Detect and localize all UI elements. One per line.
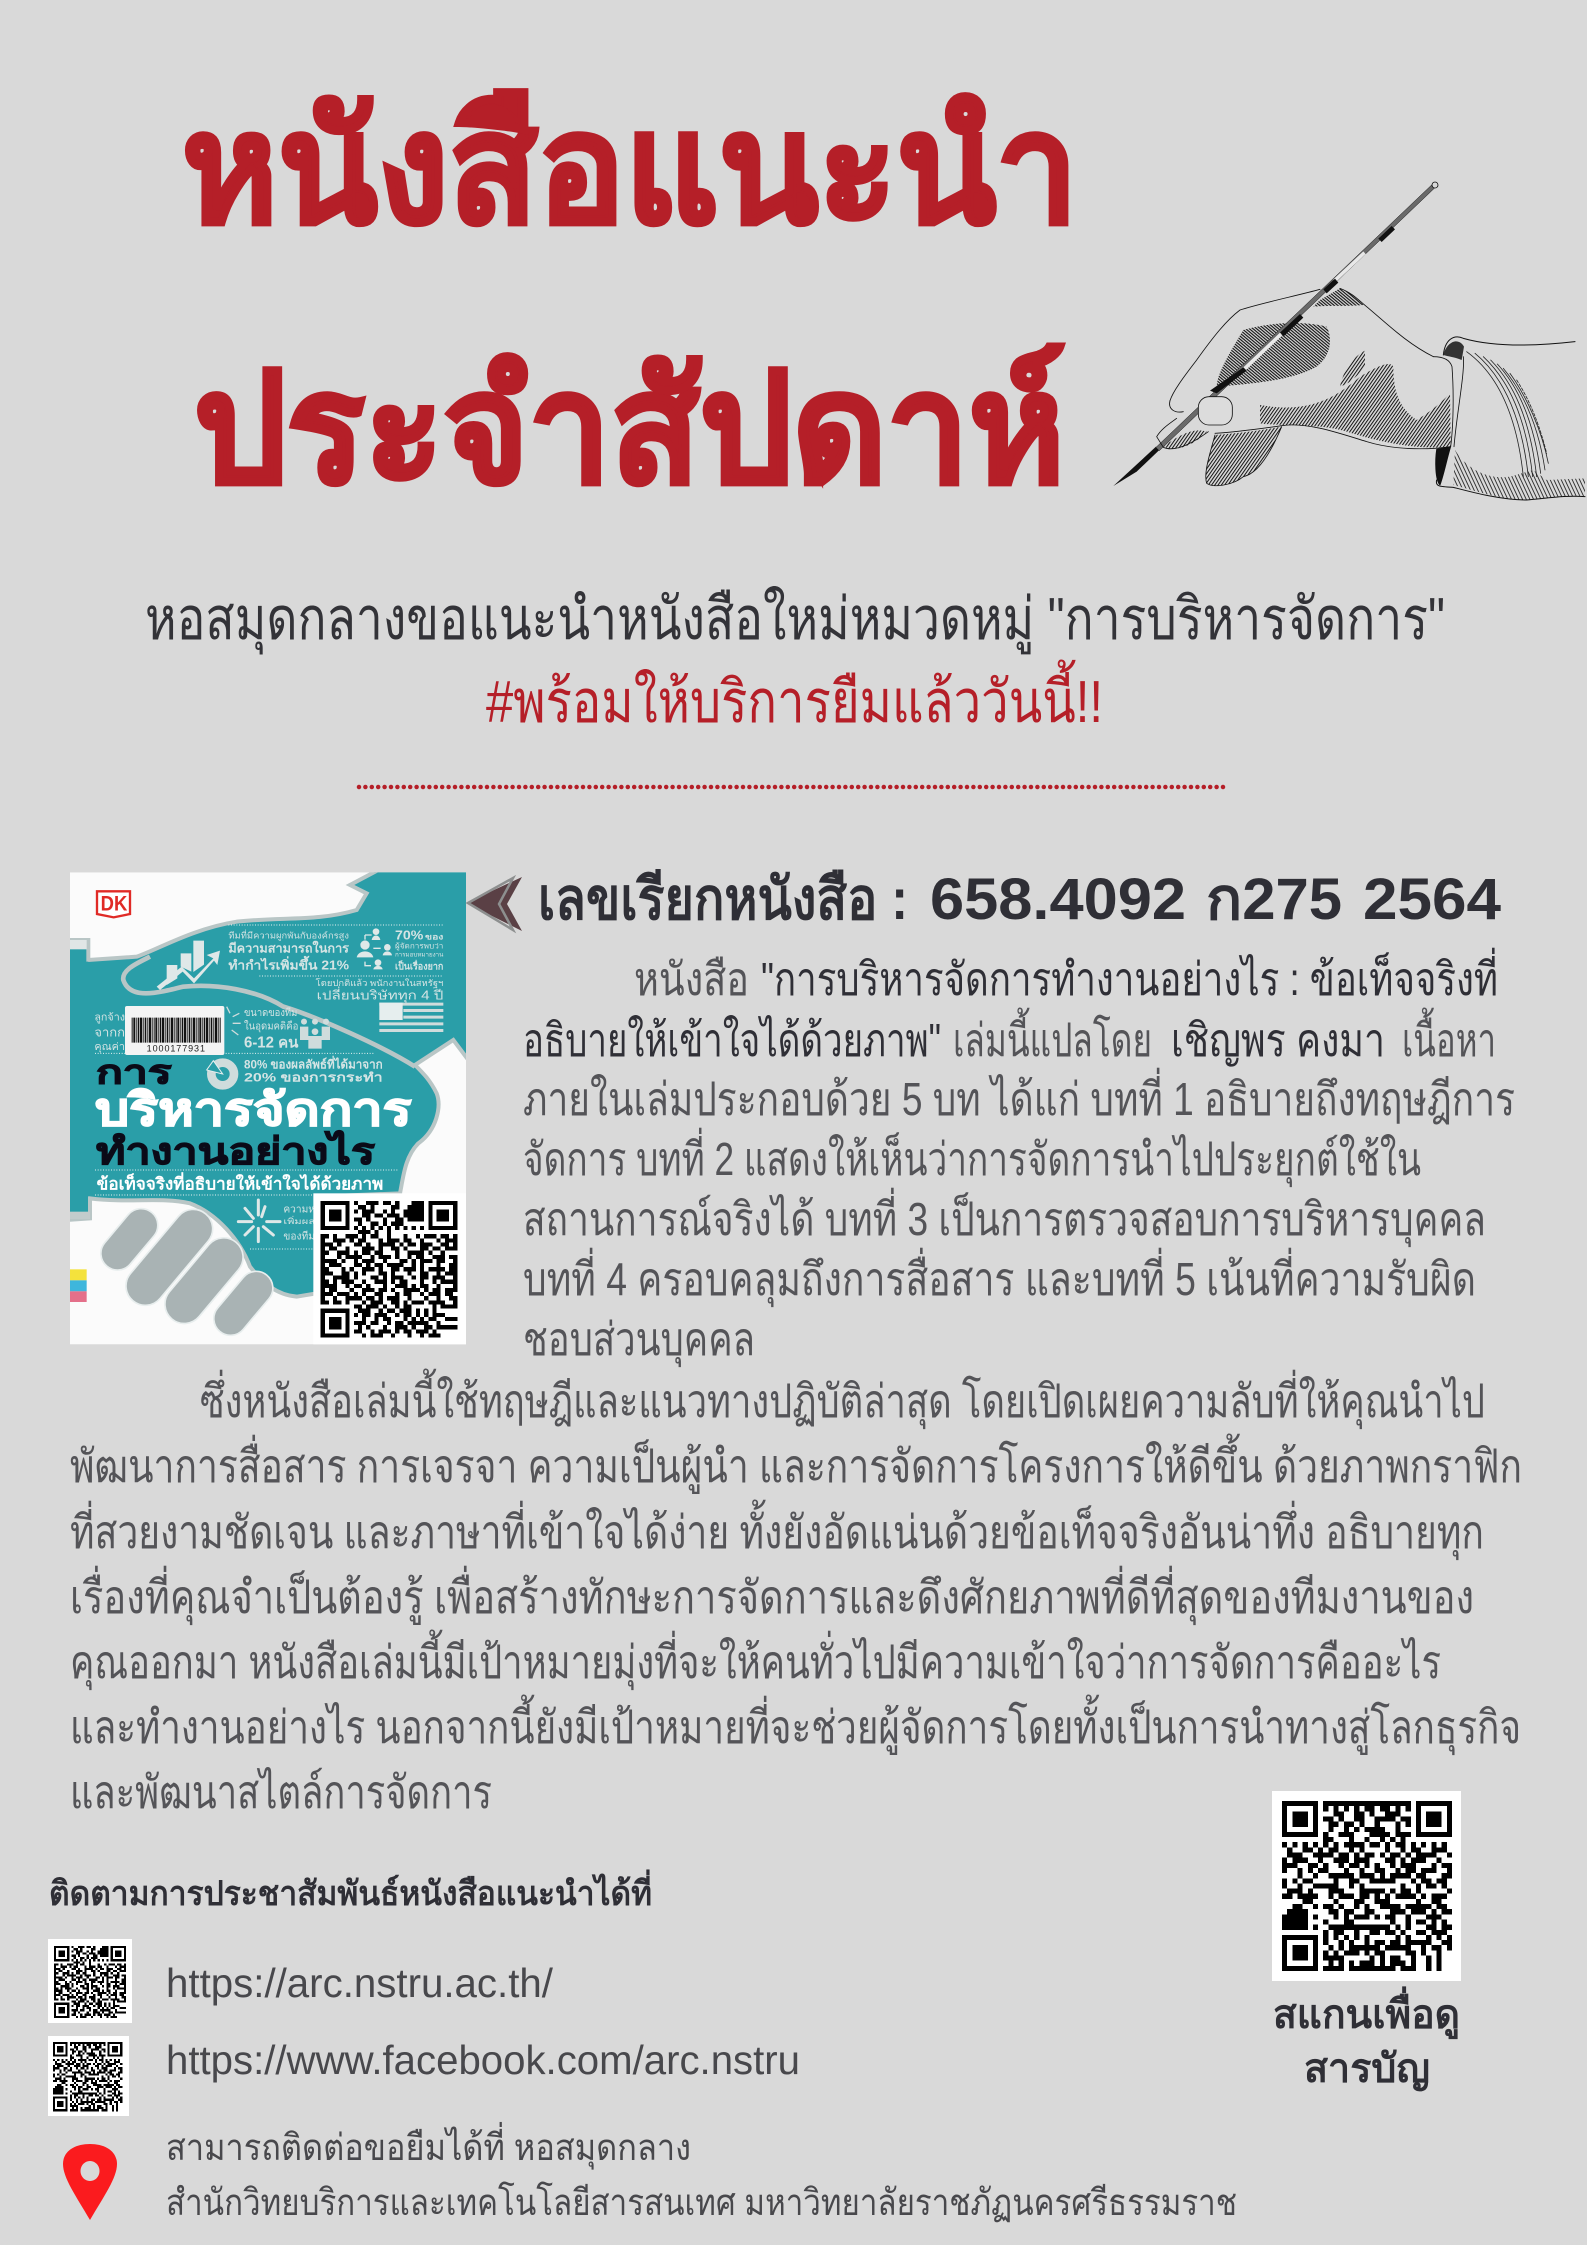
barcode label: 1000177931 [147,1044,205,1054]
illustration: hand holding a pen [1113,182,1585,500]
cover statistics text: มีความสามารถในการ [228,941,349,956]
cover statistics text: ทำกำไรเพิ่มขึ้น 21% [228,955,349,972]
QR code on cover [313,1193,466,1344]
QR code: table of contents [1272,1791,1461,1981]
teal hand shape [67,870,470,1297]
icon: people [357,928,392,969]
hand outlines [1170,289,1320,401]
icon: team [300,1019,330,1049]
icon: rising chart [157,941,220,990]
facebook URL: https://www.facebook.com/arc.nstru [166,2037,800,2083]
DK logo: DK [101,892,128,916]
cover statistics text: โดยปกติแล้ว พนักงานในสหรัฐฯ [316,978,443,989]
cover statistics text: ของทีม [283,1229,315,1242]
book cover [70,872,466,1344]
description paragraph beside the cover: หนังสือ [634,953,749,1005]
description paragraph beside the cover: ชอบส่วนบุคคล [523,1313,755,1368]
cover statistics text: ของ [425,932,443,941]
website URL: https://arc.nstru.ac.th/ [166,1960,554,2006]
colour strips [70,1269,87,1302]
book title texts: บริหารจัดการ [95,1084,412,1135]
follow heading: ติดตามการประชาสัมพันธ์หนังสือแนะนำได้ที่ [49,1869,652,1913]
caption: scan line 1: สแกนเพื่อดู [1273,1986,1460,2039]
contact address line 1: สามารถติดต่อขอยืมได้ที่ หอสมุดกลาง [166,2121,691,2170]
cover statistics text: ผู้จัดการพบว่า [395,941,443,950]
cuff folds [1467,352,1548,477]
icon: people wheel [238,1200,280,1242]
barcode label [125,1006,224,1055]
description paragraph beside the cover: เนื้อหา [1402,1007,1496,1066]
dotted rules [95,925,443,1249]
cover statistics text [94,927,444,1242]
full-width paragraph [70,1368,1522,1818]
call number: 658.4092 [930,867,1186,932]
cover statistics text: เพิ่มผล [283,1215,315,1226]
cover statistics text: ความห [283,1203,315,1215]
description paragraph beside the cover [523,947,1515,1368]
book title texts: ทำงานอย่างไร [96,1130,375,1172]
cover statistics text: จากก [94,1026,125,1040]
cover statistics text: คุณค่า [94,1042,125,1053]
cover statistics text: เปลี่ยนบริษัททุก 4 ปี [317,986,443,1003]
book title texts: การ [96,1054,172,1091]
call number: ก275 [1206,867,1342,932]
arrow icon [466,877,522,931]
description paragraph beside the cover: เล่มนี้แปลโดย [953,1007,1152,1066]
icon: location pin [63,2144,117,2220]
cover statistics text: เป็นเรื่องยาก [395,959,444,971]
QR code: facebook [48,2036,129,2116]
cover statistics text: 80% ของผลลัพธ์ที่ได้มาจาก [244,1055,383,1071]
hashtag line: #พร้อมให้บริการยืมแล้ววันนี้!! [486,659,1103,735]
QR code: website [48,1939,132,2023]
title: line 2: ประจำสัปดาห์ [194,343,1065,515]
cover statistics text: ในอุดมคติคือ [244,1019,298,1032]
description paragraph beside the cover: อธิบายให้เข้าใจได้ด้วยภาพ" [523,1014,941,1066]
cover statistics text: 20% ของการกระทำ [244,1071,383,1085]
cover statistics text: ขนาดของทีม [244,1006,297,1019]
icon: pie [207,1061,234,1085]
call number [538,867,1501,932]
icon: US flag [379,1003,443,1032]
book title texts: ข้อเท็จจริงที่อธิบายให้เข้าใจได้ด้วยภาพ [97,1171,383,1193]
full-width paragraph: และพัฒนาสไตล์การจัดการ [70,1766,492,1818]
contact address line 2: สำนักวิทยบริการและเทคโนโลยีสารสนเทศ มหาวิทยาลัยราชภัฏนครศรีธรรมราช [166,2181,1237,2223]
call number: 2564 [1363,867,1501,932]
pen [1113,447,1159,486]
cover statistics text: 70% [395,927,423,942]
cover statistics text: 6-12 คน [244,1034,299,1051]
cover statistics text: ลูกจ้าง [94,1012,125,1024]
cover statistics text: ทีมที่มีความผูกพันกับองค์กรสูง [228,929,349,941]
cover statistics text: การมอบหมายงาน [395,952,443,959]
icon: lightbulb rays [227,1007,241,1035]
spine stripe [70,940,87,949]
hand shading [1163,288,1585,500]
caption: scan line 2: สารบัญ [1304,2047,1430,2092]
fingers [100,1208,274,1336]
cuff [1443,337,1575,355]
title: line 1: หนังสือแนะนำ [182,83,1078,255]
description paragraph beside the cover: เชิญพร คงมา [1171,1014,1385,1066]
call number: เลขเรียกหนังสือ : [538,867,908,932]
book title texts [95,1054,412,1193]
